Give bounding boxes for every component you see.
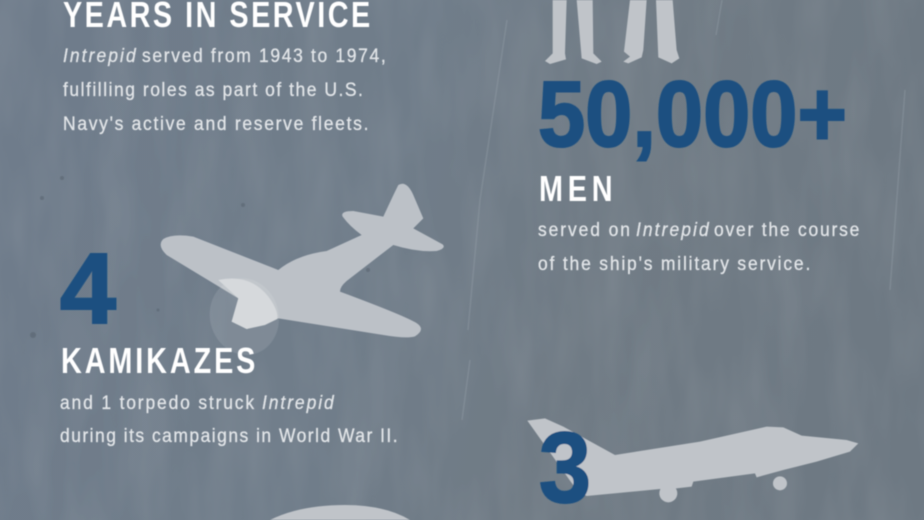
text block: kamikazes: and 1 torpedo struck — [60, 391, 255, 413]
text block: kamikazes: during its campaigns in World War II. — [60, 424, 398, 446]
text block: men: Intrepid — [636, 218, 709, 240]
icon: sailors' legs — [545, 0, 679, 64]
heading: kamikazes: KAMIKAZES — [61, 340, 255, 381]
text block: men: over the course — [714, 218, 859, 240]
text block: kamikazes — [60, 391, 398, 446]
text block: years in service — [63, 44, 386, 134]
statistic: 4: 4 — [60, 233, 116, 345]
icon: jet aircraft — [527, 418, 858, 502]
text block: men: served on — [538, 218, 630, 240]
icon: aircraft top, cropped — [270, 505, 410, 520]
text block: years in service: served from 1943 to 1974, — [142, 44, 386, 66]
text block: men: of the ship's military service. — [538, 252, 810, 274]
icon: propeller plane — [161, 184, 444, 363]
text block: men — [538, 218, 859, 274]
heading: men: MEN — [539, 168, 613, 209]
text block: kamikazes: Intrepid — [262, 391, 335, 413]
text block: years in service: Navy's active and reserve fleets. — [63, 112, 368, 134]
text block: years in service: fulfilling roles as part of the U.S. — [63, 78, 363, 100]
text block: years in service: Intrepid — [63, 44, 136, 66]
statistic: 50,000+: 50,000+ — [538, 62, 847, 166]
